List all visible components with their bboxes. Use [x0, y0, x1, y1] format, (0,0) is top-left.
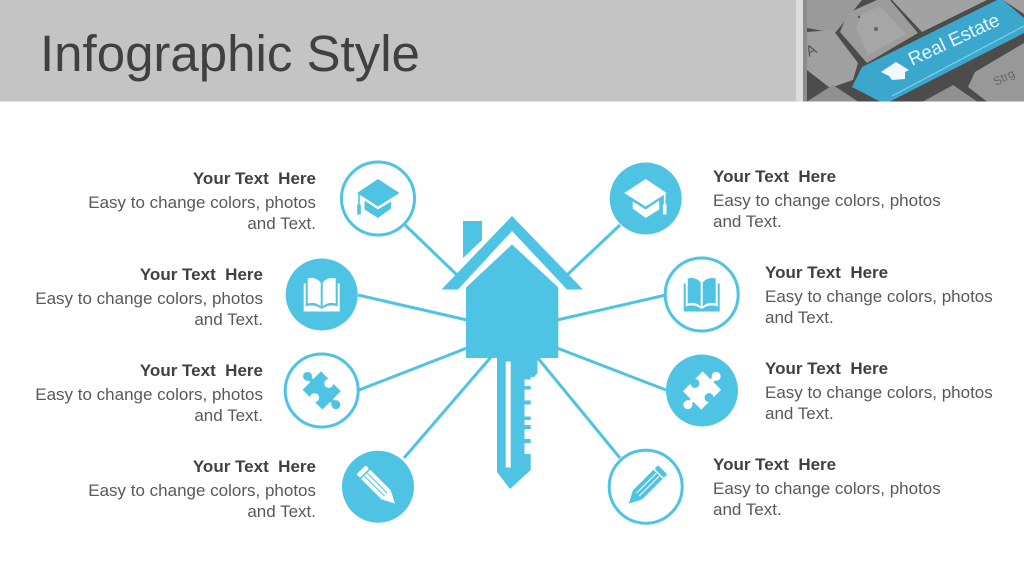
node: pencil, right, outlined — [609, 450, 682, 523]
text block: right 1: and Text. — [713, 212, 782, 231]
text block: left 4: Your Text Here — [193, 457, 316, 476]
text block: left 3: Your Text Here — [140, 361, 263, 380]
text block: right 2: Your Text Here — [765, 263, 888, 282]
node: pencil, left, filled — [342, 451, 414, 523]
text block: left 1: Easy to change colors, photos — [88, 193, 316, 212]
photo: real estate keyboard: Strg — [991, 66, 1017, 89]
text block: left 2: and Text. — [194, 310, 263, 329]
text block: right 1 — [713, 167, 941, 231]
node: cap, left, outlined — [342, 162, 414, 235]
text block: left 2 — [35, 265, 263, 329]
text block: left 3 — [35, 361, 263, 425]
text block: right 3: Your Text Here — [765, 359, 888, 378]
text block: left 4: Easy to change colors, photos — [88, 481, 316, 500]
node: puzzle, right, filled — [666, 354, 738, 426]
node: book, right, outlined — [665, 258, 738, 331]
text block: right 3 — [765, 359, 993, 423]
photo: real estate keyboard: Real Estate — [905, 10, 1003, 71]
text block: right 3: and Text. — [765, 404, 834, 423]
text block: left 3: and Text. — [194, 406, 263, 425]
chimney — [463, 221, 482, 258]
text block: left 1: and Text. — [247, 214, 316, 233]
connector lines — [358, 224, 666, 458]
key — [497, 356, 538, 489]
node: cap, right, filled — [610, 162, 682, 234]
text block: left 4: and Text. — [247, 502, 316, 521]
photo: real estate keyboard: A — [803, 41, 820, 61]
roof — [442, 216, 583, 290]
text block: left 4 — [88, 457, 316, 521]
node: puzzle, left, outlined — [285, 354, 358, 427]
node: book, left, filled — [286, 258, 358, 330]
header band — [0, 0, 1024, 102]
text block: right 2: Easy to change colors, photos — [765, 287, 993, 306]
house body — [466, 244, 558, 358]
text block: left 2: Easy to change colors, photos — [35, 289, 263, 308]
text block: right 4: Your Text Here — [713, 455, 836, 474]
text block: left 1: Your Text Here — [193, 169, 316, 188]
text block: right 2: and Text. — [765, 308, 834, 327]
text block: right 4 — [713, 455, 941, 519]
text block: right 2 — [765, 263, 993, 327]
text block: left 2: Your Text Here — [140, 265, 263, 284]
text block: left 3: Easy to change colors, photos — [35, 385, 263, 404]
photo: real estate keyboard — [796, 0, 1024, 102]
text block: right 4: Easy to change colors, photos — [713, 479, 941, 498]
title: Infographic Style — [40, 25, 420, 82]
text block: right 3: Easy to change colors, photos — [765, 383, 993, 402]
text block: left 1 — [88, 169, 316, 233]
text block: right 4: and Text. — [713, 500, 782, 519]
house and key icon — [442, 216, 583, 489]
text block: right 1: Easy to change colors, photos — [713, 191, 941, 210]
text block: right 1: Your Text Here — [713, 167, 836, 186]
